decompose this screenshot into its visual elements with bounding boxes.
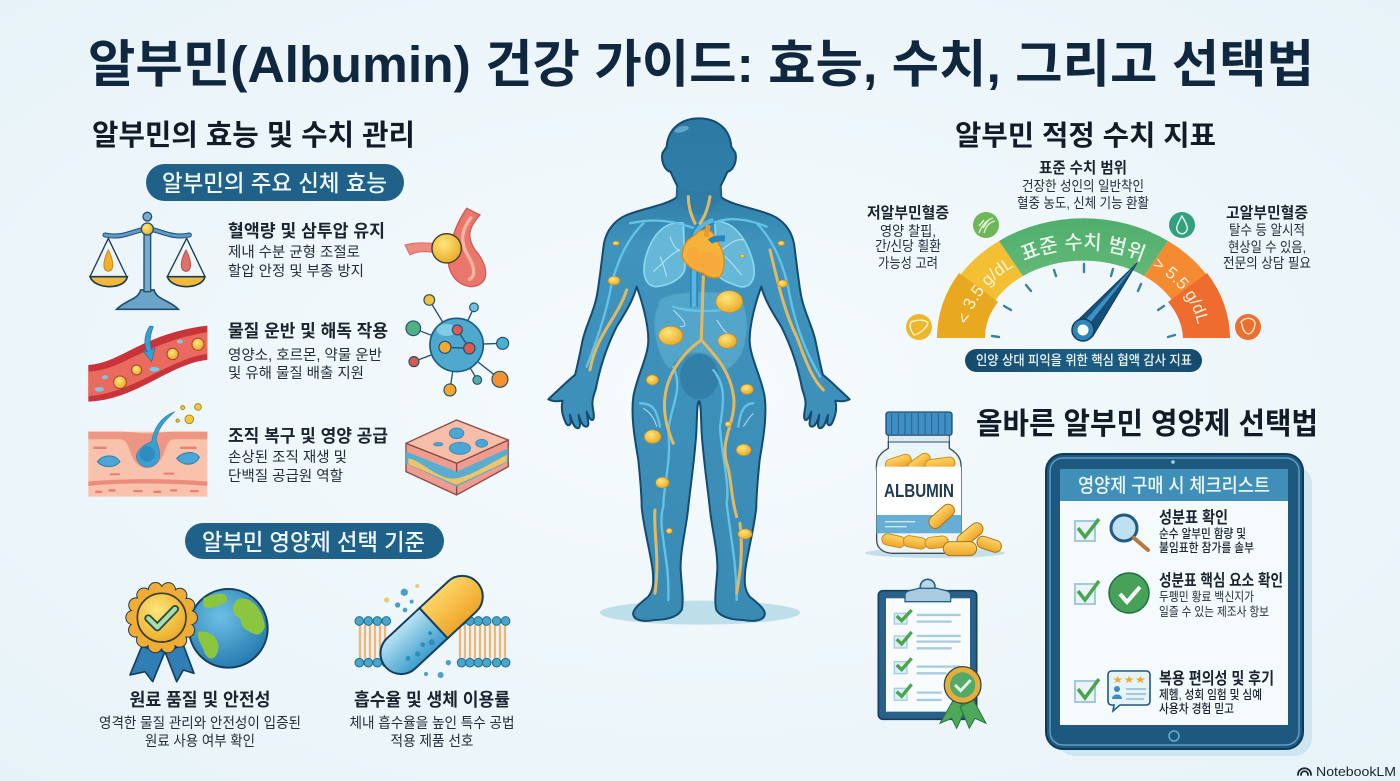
label: hypoalbuminemia: 저알부민혈증 (867, 204, 949, 222)
text block: transport and detox: 물질 운반 및 해독 작용 (228, 321, 388, 341)
check item: convenience and reviews: 제헴, 성회 임험 및 심예 (1159, 687, 1262, 702)
text block: tissue repair: 손상된 조직 재생 및 (228, 449, 347, 466)
check item: ingredient label: 불임표한 참가를 솔부 (1159, 541, 1254, 555)
icon: skin tissue repair (88, 404, 207, 497)
label: hypoalbuminemia: 영양 찰핍, (880, 223, 936, 239)
icon: kidney (1235, 314, 1261, 340)
label: hypoalbuminemia: 가능성 고려 (878, 255, 938, 271)
check item: ingredient label (1075, 508, 1254, 555)
check item: ingredient label: 순수 알부민 함량 및 (1159, 526, 1246, 541)
heading: normal range indicator: 알부민 적정 수치 지표 (955, 120, 1216, 151)
text block: tissue repair: 조직 복구 및 영양 공급 (228, 426, 388, 446)
yellow arteries (590, 197, 823, 593)
gauge segment: low (937, 241, 1023, 338)
section pill: supplement criteria (185, 523, 444, 559)
icon: balance scale (90, 212, 205, 309)
icon: nutrition plant (973, 212, 999, 238)
text block: absorption: 흡수율 및 생체 이용률 (354, 690, 510, 710)
icon: quality medal and globe (130, 589, 268, 682)
gauge text: high value: > 5.5 g/dL (1153, 258, 1208, 324)
label: hypoalbuminemia: 간/신당 횔환 (875, 238, 941, 254)
text block: absorption: 체내 흡수율을 높인 특수 공법 (350, 715, 514, 732)
text block: transport and detox: 영양소, 호르몬, 약물 운반 (228, 347, 382, 364)
NotebookLM watermark: NotebookLM (1316, 764, 1396, 779)
label: hyperalbuminemia: 현상일 수 있음, (1228, 239, 1306, 255)
label: normal range: 혈중 농도, 신체 기능 환활 (1017, 195, 1149, 211)
text block: blood volume: 혈액량 및 삼투압 유지 (228, 221, 385, 241)
section pill: supplement criteria: 알부민 영양제 선택 기준 (202, 529, 425, 555)
section pill: main body benefits: 알부민의 주요 신체 효능 (162, 170, 387, 196)
heart (682, 225, 725, 278)
label: normal range: 건장한 성인의 일반착인 (1022, 178, 1144, 194)
text block: absorption: 적용 제품 선호 (390, 733, 474, 750)
label: ALBUMIN: ALBUMIN (884, 481, 954, 501)
text block: blood volume (228, 221, 385, 280)
nodules (608, 241, 788, 539)
title: 알부민(Albumin) 건강 가이드: 효능, 수치, 그리고 선택법 (88, 36, 1314, 93)
chart: semicircular gauge (906, 212, 1261, 342)
icon: molecule (406, 295, 509, 396)
check item: key elements (1075, 571, 1283, 619)
gauge segment: normal (999, 218, 1168, 276)
text block: tissue repair: 단백질 공급원 역할 (228, 468, 343, 485)
text block: ingredient quality (99, 690, 301, 750)
check item: key elements: 성분표 핵심 요소 확인 (1159, 571, 1283, 590)
gauge needle (1072, 263, 1137, 341)
text block: ingredient quality: 원료 품질 및 안전성 (130, 690, 270, 710)
gauge text: normal range: 표준 수치 범위 (1020, 232, 1146, 262)
pill: nutrition audit indicator: 인양 상대 피익을 위한 핵심 협액 감사 지표 (976, 353, 1192, 368)
icon: liver (906, 314, 932, 340)
panel: tablet checklist (1046, 454, 1312, 756)
icon: clipboard with medal (878, 579, 986, 728)
heading: benefits and management: 알부민의 효능 및 수치 관리 (92, 119, 415, 152)
icon: albumin bottle (865, 412, 1005, 558)
panel: choosing the right supplement (865, 408, 1318, 756)
gauge segment: high (1144, 241, 1230, 338)
text block: tissue repair (228, 426, 388, 485)
panel: left column, benefits and numbers (88, 119, 515, 750)
check item: key elements: 두펭민 황료 백신지가 (1159, 590, 1254, 604)
abdomen (655, 292, 746, 370)
label: hypoalbuminemia (867, 204, 949, 271)
label: normal range: 표준 수치 범위 (1039, 159, 1127, 177)
check item: convenience and reviews: ★★★ (1112, 675, 1146, 686)
lungs (644, 222, 754, 287)
text block: transport and detox (228, 321, 388, 382)
text block: ingredient quality: 원료 사용 여부 확인 (145, 733, 255, 750)
checklist header: 영양제 구매 시 체크리스트 (1078, 475, 1270, 497)
tablet frame (1046, 454, 1312, 756)
icon: tissue block (406, 420, 508, 495)
icon: water drop (1169, 212, 1195, 238)
panel: gauge of normal albumin range (867, 120, 1311, 372)
label: hyperalbuminemia: 탈수 등 알시적 (1229, 222, 1305, 238)
icon: vessel with albumin ball (405, 208, 486, 287)
text block: transport and detox: 및 유해 물질 배출 지원 (228, 365, 364, 382)
check item: ingredient label: 성분표 확인 (1159, 508, 1228, 527)
text block: ingredient quality: 영격한 물질 관리와 안전성이 입증된 (99, 715, 301, 732)
text block: absorption (350, 690, 514, 750)
pill: nutrition audit indicator (965, 349, 1202, 372)
text block: blood volume: 제내 수분 균형 조절로 (228, 244, 360, 261)
label: hyperalbuminemia: 고알부민혈증 (1226, 204, 1308, 222)
icon: blood vessel with nutrients (88, 326, 207, 402)
blue vessels (587, 219, 820, 600)
check item: convenience and reviews: 복용 편의성 및 후기 (1159, 669, 1274, 688)
icon: capsule through cell membrane (355, 567, 510, 683)
check item: convenience and reviews (1075, 669, 1274, 716)
central human body illustration (548, 118, 850, 625)
heading: supplement selection: 올바른 알부민 영양제 선택법 (976, 408, 1318, 441)
label: normal range (1017, 159, 1149, 211)
section pill: main body benefits (146, 164, 404, 201)
label: hyperalbuminemia: 전문의 상담 필요 (1223, 255, 1311, 271)
check item: key elements: 일즐 수 있는 제조사 항보 (1159, 605, 1269, 619)
check item: convenience and reviews: 사용차 경험 믿고 (1159, 701, 1234, 716)
label: hyperalbuminemia (1223, 204, 1311, 271)
text block: blood volume: 할압 안정 및 부종 방지 (228, 263, 364, 280)
gauge text: low value: < 3.5 g/dL (961, 260, 1014, 322)
